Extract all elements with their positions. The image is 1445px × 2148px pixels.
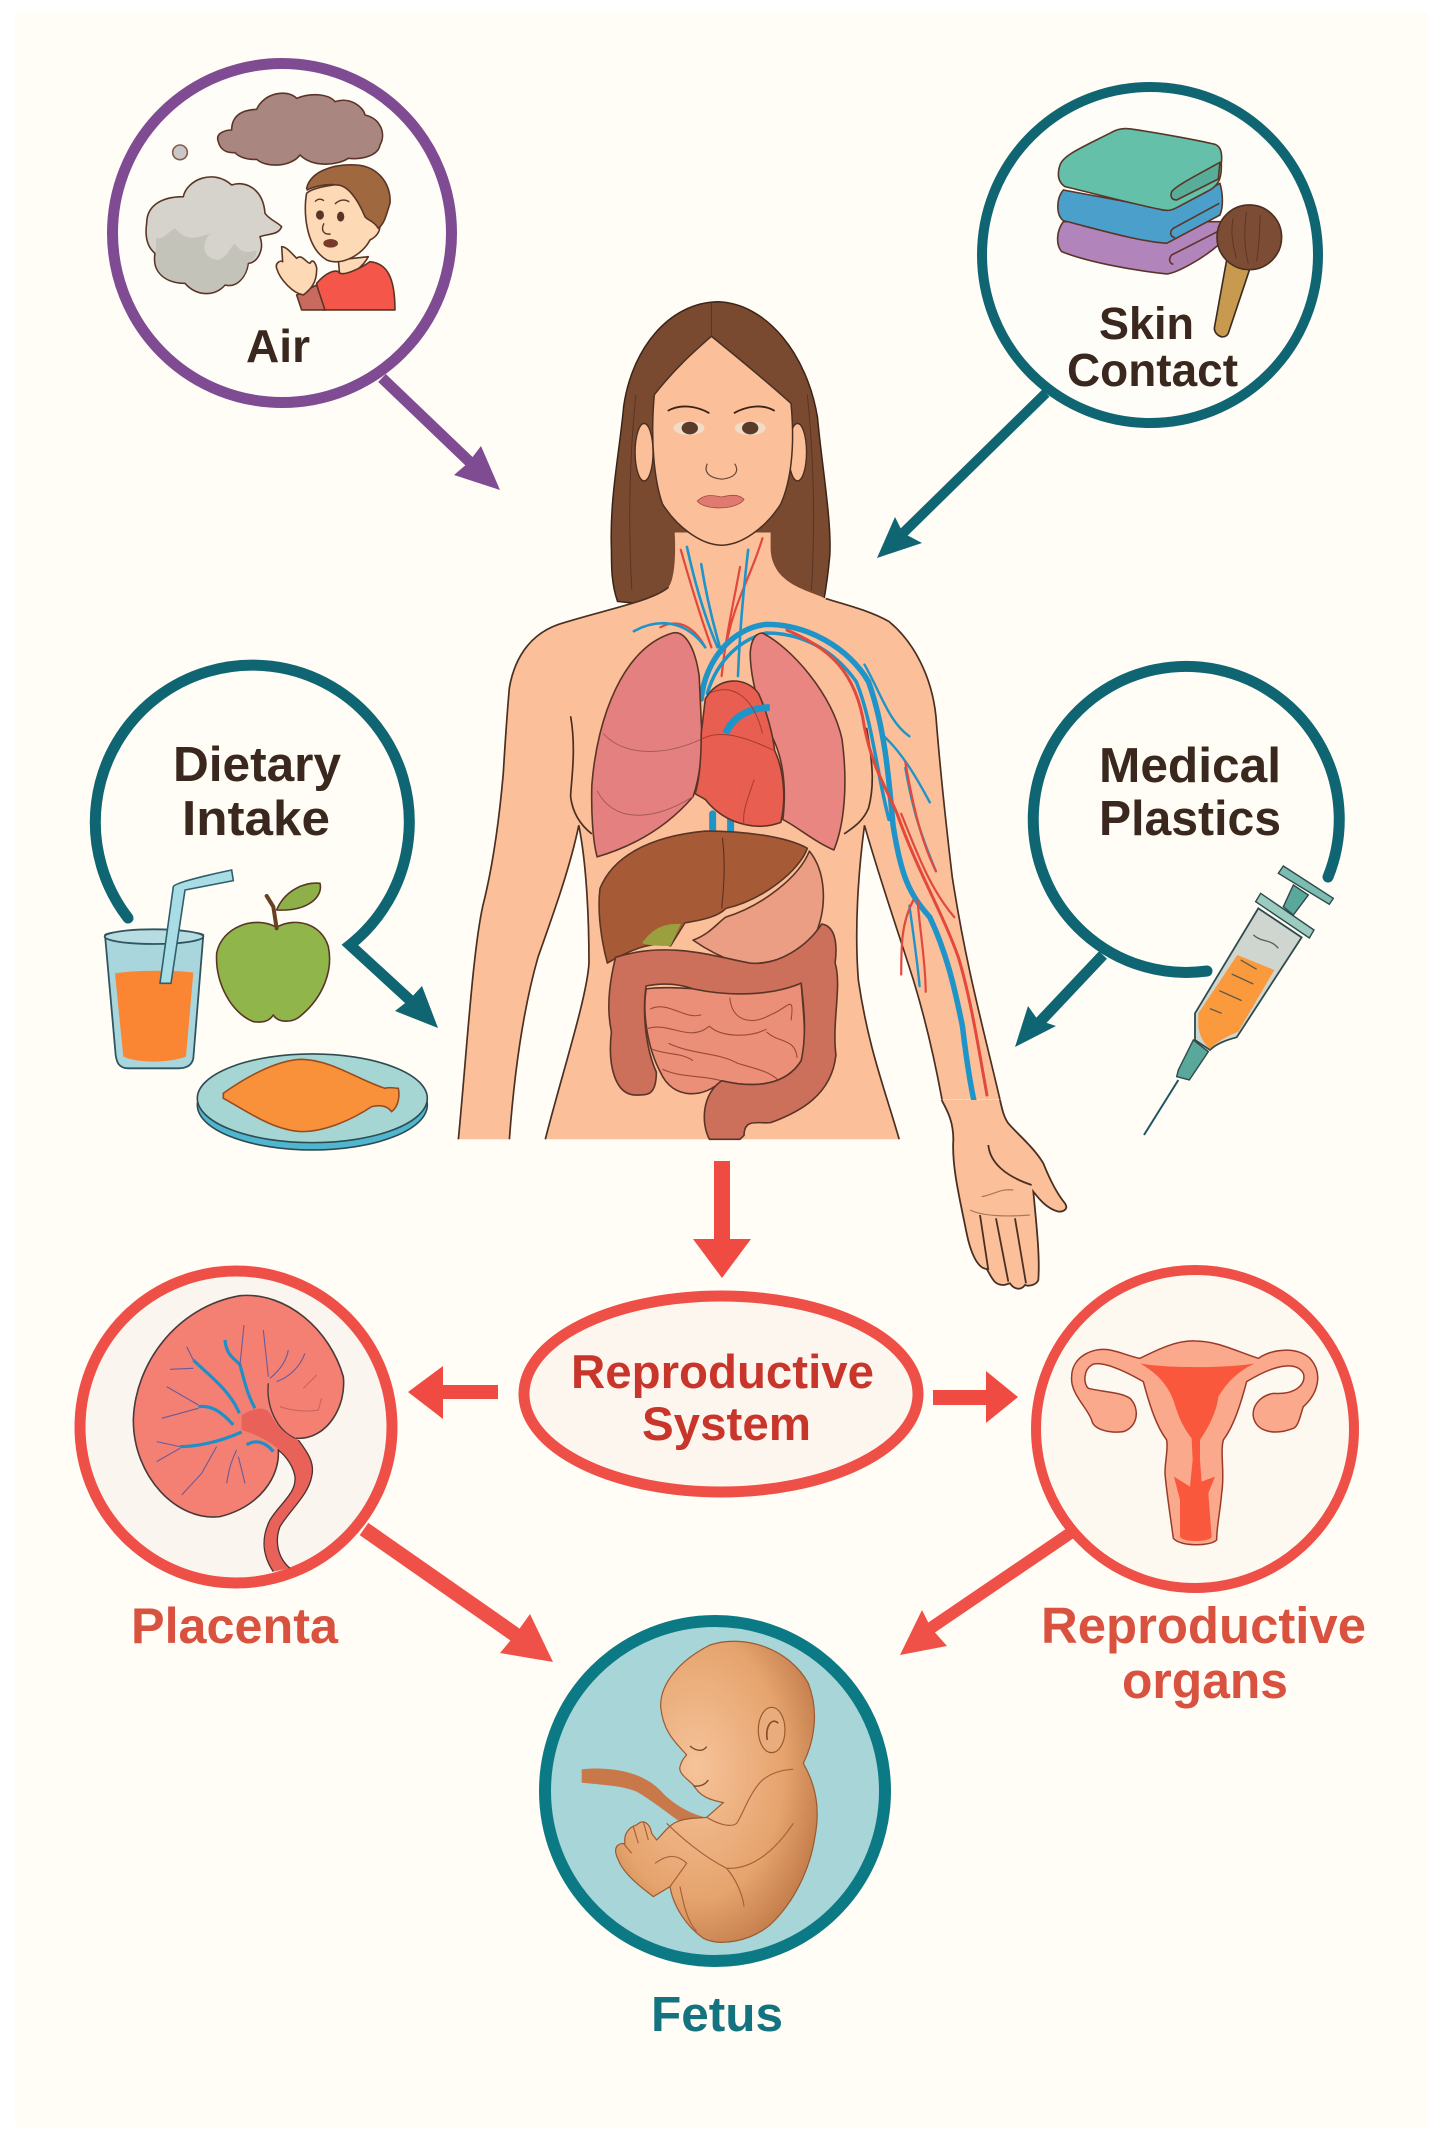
icon: uterus and ovaries [1072,1341,1318,1545]
icon: smoke clouds and boy [146,93,395,310]
small intestine [645,983,804,1094]
label: Dietary Intake: Dietary [173,738,341,792]
placenta circle ring [80,1271,392,1583]
woman's hair [611,302,830,607]
air circle ring [112,64,452,402]
icon: syringe [1144,866,1333,1135]
stomach [693,851,823,964]
label: Dietary Intake: Intake [182,792,330,846]
gallbladder [642,924,681,946]
arrow: body to reproductive system [693,1161,751,1278]
node: Reproductive System [524,1296,918,1492]
icon: juice, apple and plate [105,870,427,1150]
icon: placenta with vessels [133,1295,344,1572]
label: Reproductive organs: organs [1122,1652,1288,1709]
dietary arc and arrow [95,665,438,1028]
organs to fetus arrow [900,1532,1072,1655]
icon: towels and makeup brush [1058,128,1282,337]
liver [599,831,807,963]
panel: placenta [80,1271,553,1662]
large intestine [609,924,838,1139]
node: Reproductive System: System [642,1397,811,1450]
label: Skin Contact: Skin [1099,298,1194,349]
label: Skin Contact: Contact [1067,344,1238,396]
blood vessels [634,538,987,1112]
lungs [592,633,845,857]
label: Skin Contact [1067,298,1238,396]
woman's face [635,336,807,545]
heart [695,681,784,826]
fetus circle [545,1621,885,1961]
label: Reproductive organs [1041,1597,1366,1709]
label: Placenta: Placenta [131,1598,339,1654]
panel: dietary intake exposure [95,665,438,1150]
label: Medical Plastics: Plastics [1099,792,1281,846]
panel: medical plastics exposure [1015,666,1339,1135]
label: Dietary Intake [173,738,341,846]
label: Air: Air [246,320,310,372]
skin contact arrow [877,393,1046,558]
label: Medical Plastics: Medical [1099,739,1281,793]
panel: reproductive organs [900,1270,1366,1709]
node: Reproductive System: Reproductive [571,1345,874,1398]
woman's hand [942,1100,1066,1289]
arrow: to placenta [408,1366,498,1419]
air exposure arrow [382,378,500,490]
panel: skin contact exposure [877,87,1318,558]
arrow: to reproductive organs [933,1371,1018,1423]
panel: fetus [545,1621,885,2042]
figure: woman with internal organs [458,302,1066,1289]
illustration: fetus [582,1641,817,1942]
skin contact circle ring [982,87,1318,423]
woman's torso and arms [458,533,1000,1139]
placenta to fetus arrow [364,1529,553,1662]
label: Fetus: Fetus [651,1988,783,2042]
panel: air exposure [112,64,500,490]
medical arc and arrow [1015,666,1339,1047]
label: Medical Plastics [1099,739,1281,846]
label: Reproductive organs: Reproductive [1041,1597,1366,1654]
reproductive organs circle ring [1036,1270,1354,1588]
